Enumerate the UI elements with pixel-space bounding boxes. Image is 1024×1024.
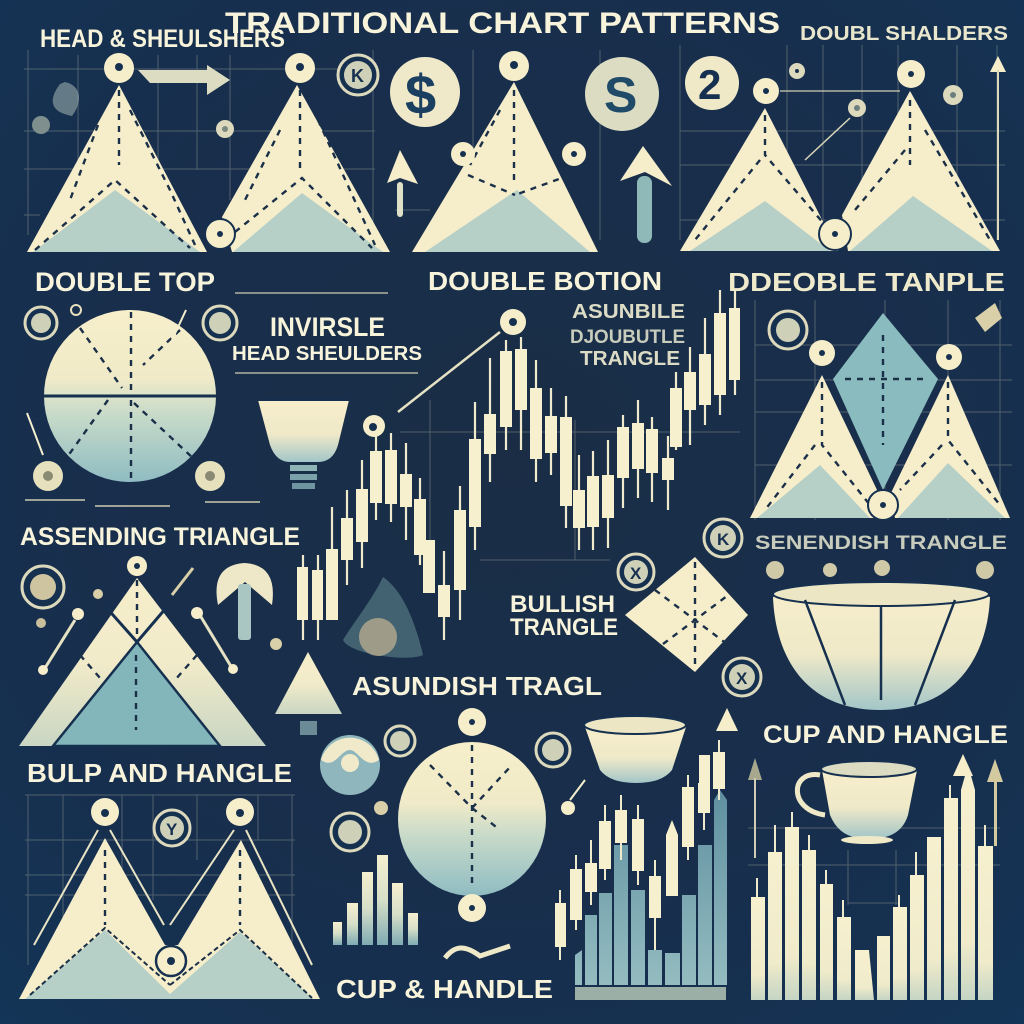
knob: trough (205, 219, 235, 249)
label: bullish triangle: BULLISH (510, 591, 615, 618)
icon: K seal: K (351, 66, 364, 86)
icon: eye emblem (320, 735, 380, 795)
arrow left (748, 758, 762, 858)
label: cup and hangle: CUP AND HANGLE (763, 721, 1008, 749)
seal: upper right (203, 306, 237, 340)
knob: lower left (33, 461, 63, 491)
seal: bottom left (331, 813, 369, 851)
pointer top (172, 568, 193, 595)
knob: right (976, 561, 994, 579)
knob: trough (868, 490, 898, 520)
M polygon (19, 838, 320, 999)
icon: dollar coin (390, 57, 460, 127)
label: double top: DOUBLE TOP (35, 267, 215, 297)
label: double bottom: DOUBLE BOTION (428, 266, 662, 296)
inner teal (425, 190, 590, 252)
seal: top right (536, 733, 570, 767)
knob: left (753, 78, 779, 104)
seal: X lower: X (736, 669, 748, 688)
panel: ascending triangle (19, 556, 273, 746)
arrow: up (990, 56, 1006, 240)
label: bullish triangle: TRANGLE (510, 614, 618, 641)
heading: DOUBL SHALDERS (800, 23, 1008, 45)
teal columns (575, 790, 727, 985)
seal: top left (385, 726, 415, 756)
arrow: right (138, 65, 230, 95)
wicks (757, 785, 985, 917)
arrow middle (953, 754, 973, 776)
icon: small fragment (270, 638, 282, 650)
dashed lines (468, 90, 570, 195)
arrow: up large (620, 146, 672, 243)
icon: S coin: S (604, 67, 637, 123)
knob: pointer ball (561, 780, 585, 815)
knob: left (766, 561, 784, 579)
knob: right (936, 344, 962, 370)
panel: large bowl (766, 560, 994, 710)
panel: head and shoulders (24, 25, 390, 252)
seal: K (704, 519, 742, 557)
sphere (398, 742, 546, 896)
candle wicks (560, 740, 719, 960)
knob: top (499, 51, 529, 81)
label: bulp and hangle: BULP AND HANGLE (27, 758, 292, 788)
pointer right (191, 607, 238, 674)
chart: teal and cream candles (555, 708, 738, 1000)
triangle (19, 578, 266, 746)
knob: lower right (195, 461, 225, 491)
teal dotted hills (25, 930, 313, 999)
pointer: upper right (172, 310, 186, 340)
triangle (412, 82, 598, 252)
knob: small (216, 120, 234, 138)
icon: small bowl (584, 716, 686, 783)
knob: small upper (789, 63, 805, 79)
center dashes (105, 850, 240, 925)
pointer: lower left (27, 413, 43, 455)
label: asymmetric double triangle (570, 301, 685, 370)
label: asymmetric double triangle: ASUNBILE (572, 301, 685, 323)
candle bodies (555, 752, 725, 947)
label: asymmetric double triangle: TRANGLE (580, 348, 680, 370)
knob: left (91, 798, 119, 826)
knob: top (458, 708, 486, 736)
knob: top (500, 309, 526, 335)
scribble: below sphere (25, 500, 260, 506)
bodies (297, 308, 740, 620)
dashes in diamond (845, 335, 925, 445)
arrow right (987, 759, 1003, 846)
icon: diamond (625, 557, 748, 672)
seal (154, 810, 190, 846)
small tag (93, 589, 103, 599)
label: double triangle: DDEOBLE TANPLE (728, 267, 1005, 297)
knob: small right (943, 85, 963, 105)
seal (769, 311, 807, 349)
left triangle (680, 108, 838, 251)
icon: S coin (585, 57, 659, 131)
sphere (44, 310, 216, 482)
icon: number seal (685, 56, 739, 110)
panel: bottom sphere (320, 708, 570, 922)
right peak triangle (222, 85, 390, 252)
knob: right (562, 142, 586, 166)
knob: left (451, 142, 475, 166)
seal: Y (166, 820, 178, 839)
label: asymmetric double triangle: DJOUBUTLE (570, 327, 685, 348)
hill outline (30, 928, 312, 998)
seal left (22, 566, 64, 608)
creases (105, 606, 166, 642)
label: asundish: ASUNDISH TRAGL (352, 671, 602, 701)
panel: center top triangle (395, 50, 600, 252)
seal: K: K (717, 530, 730, 549)
teal core (53, 642, 220, 746)
seal: X upper: X (630, 564, 642, 583)
icon: netted figure (343, 577, 423, 658)
ring: small (71, 305, 81, 315)
pointer line (398, 332, 500, 412)
axis lines (44, 394, 216, 398)
knob: trough (819, 218, 851, 250)
pointer (805, 118, 850, 160)
left triangle (750, 375, 878, 518)
panel: bottom M pattern (19, 795, 320, 999)
knob: left (809, 340, 835, 366)
knob: right peak (285, 53, 315, 83)
panel: sphere with axis (25, 305, 260, 506)
panel: right triangles and diamond (750, 300, 1012, 520)
knob: center left (823, 563, 837, 577)
chart: central candlesticks (297, 290, 740, 640)
icon: bowl on stand (258, 400, 349, 489)
knob: low (363, 415, 385, 437)
knob: trough (156, 946, 186, 976)
knob: right (226, 798, 254, 826)
label: inverse: INVIRSLE (270, 312, 385, 342)
right triangle (842, 91, 1000, 251)
knob (127, 556, 147, 576)
wicks (303, 290, 735, 640)
arrow (716, 708, 738, 731)
arrow in arch (217, 563, 273, 640)
icon: dollar coin: $ (405, 63, 436, 126)
seal: X lower (723, 658, 761, 696)
label: head shoulders: HEAD SHEULDERS (232, 343, 422, 365)
seal: upper left (25, 307, 57, 339)
pointer left (38, 608, 84, 675)
title: TRADITIONAL CHART PATTERNS (225, 7, 780, 40)
outer cream lines (34, 830, 312, 965)
label: ascending triangle: ASSENDING TRIANGLE (20, 523, 300, 551)
dashes (430, 745, 512, 885)
seal: X upper (618, 554, 654, 590)
small fragment (36, 618, 46, 628)
knob: left peak (104, 53, 134, 83)
arrow: up small (387, 150, 418, 217)
icon: corner tag (975, 303, 1002, 332)
teal diamond (833, 313, 938, 490)
knob: center right (874, 560, 890, 576)
icon: small ball (374, 801, 388, 815)
icon: handle scribble (445, 946, 510, 958)
icon: K seal (338, 55, 378, 95)
label: cup and handle: CUP & HANDLE (336, 974, 553, 1004)
left peak triangle (27, 85, 207, 252)
label: senendish triangle: SENENDISH TRANGLE (755, 533, 1007, 554)
icon: small triangle (275, 652, 342, 735)
chart: rising cream bars (748, 754, 1003, 1000)
divider bars (235, 293, 418, 373)
bars (751, 765, 993, 1000)
icon: small coin (32, 116, 50, 134)
right triangle (890, 375, 1010, 518)
label: bullish triangle (510, 591, 618, 641)
knob: right (897, 60, 925, 88)
decorative strip (575, 987, 726, 1000)
icon: small shield (53, 82, 79, 116)
knob: small middle (848, 99, 866, 117)
panel: double shoulders (680, 23, 1008, 251)
icon: number seal: 2 (698, 61, 721, 108)
icon: cup with handle (797, 761, 917, 844)
knob: bottom (458, 894, 486, 922)
heading: head and shoulders: HEAD & SHEULSHERS (40, 25, 285, 53)
chart: small bars (333, 855, 418, 945)
